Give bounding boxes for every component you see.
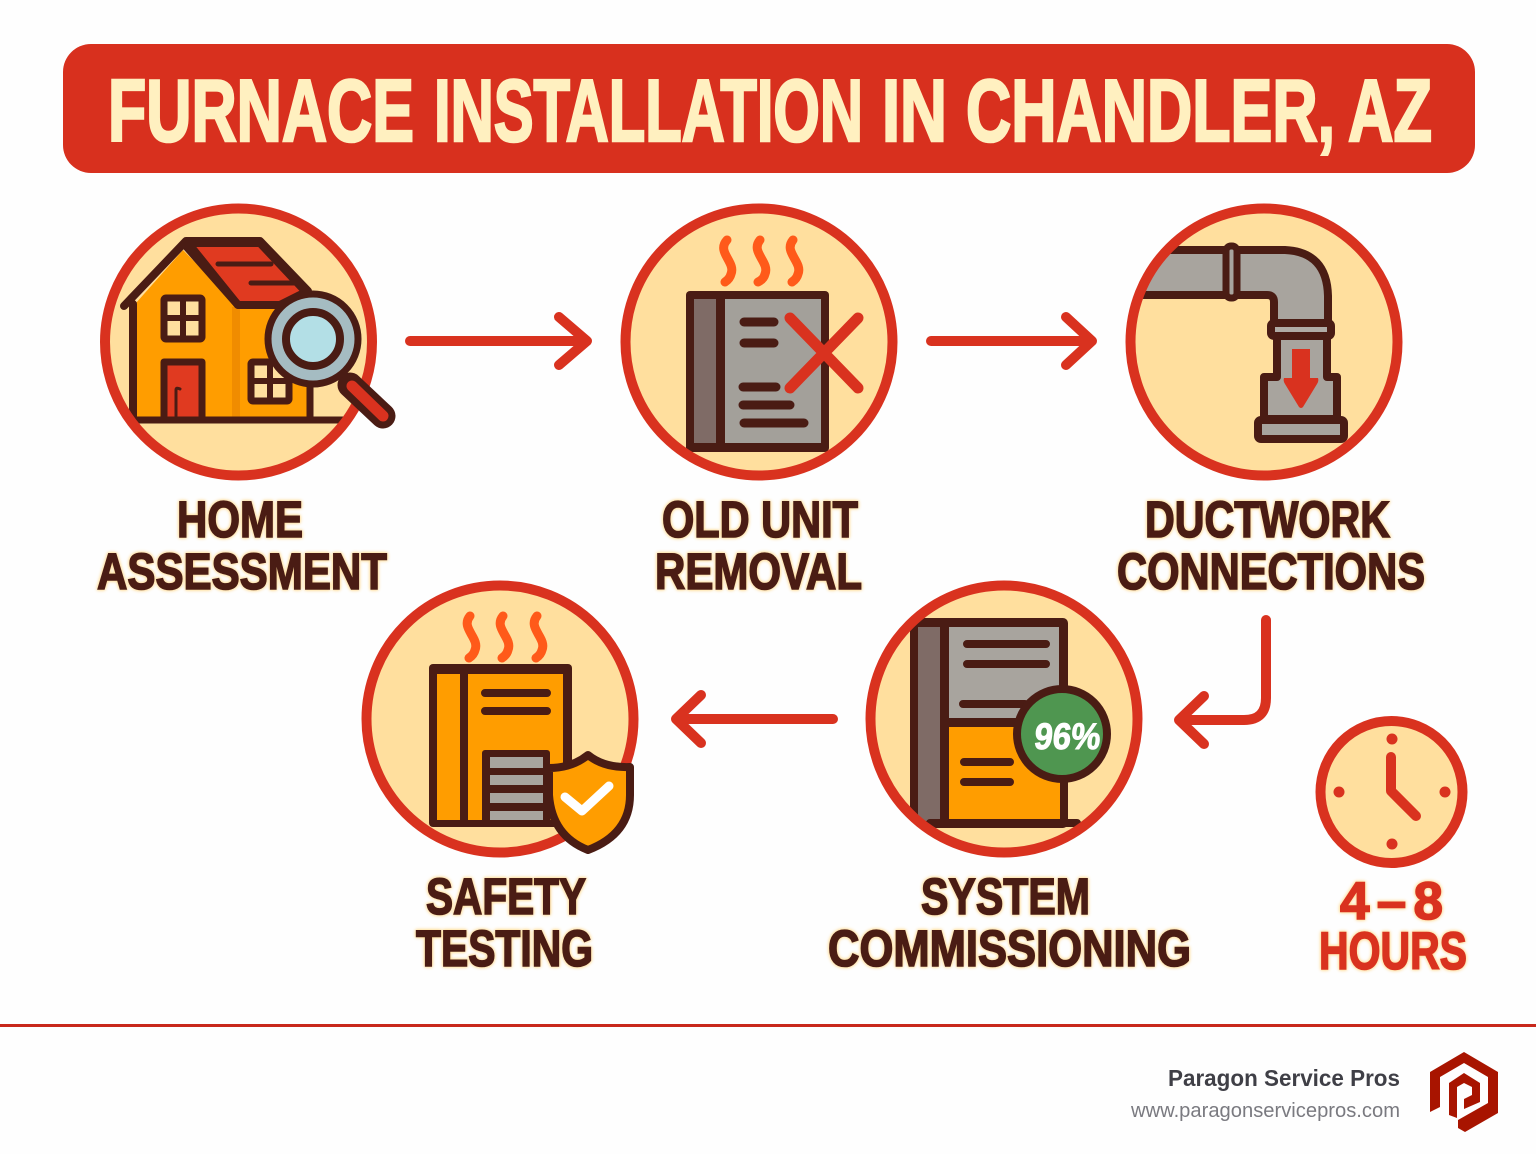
title: CHANDLER,: [966, 61, 1335, 160]
label: safety testing: TESTING: [416, 920, 593, 977]
footer brand text: [1130, 1065, 1400, 1122]
icon: old unit removal: [626, 208, 892, 476]
label: home assessment: ASSESSMENT: [97, 543, 387, 600]
label: ductwork connections: DUCTWORK: [1145, 491, 1390, 548]
icon: clock: [1320, 721, 1462, 863]
logo: [1430, 1052, 1498, 1132]
icon: home assessment: [105, 208, 383, 476]
arrow: step 2 to 3: [931, 317, 1092, 365]
label: home assessment: HOME: [177, 491, 303, 548]
label: system commissioning: [828, 868, 1191, 977]
label: system commissioning: COMMISSIONING: [828, 920, 1191, 977]
label: ductwork connections: CONNECTIONS: [1117, 543, 1425, 600]
label: ductwork connections: [1117, 491, 1425, 600]
title: INSTALLATION: [434, 61, 863, 160]
label: system commissioning: SYSTEM: [921, 868, 1090, 925]
icon: system commissioning: [870, 586, 1138, 852]
duration label: [1319, 872, 1467, 981]
title: FURNACE: [108, 61, 414, 160]
title: [108, 61, 1432, 160]
title: IN: [882, 61, 947, 160]
arrow: step 4 to 5: [676, 695, 833, 743]
footer brand text: Paragon Service Pros: [1168, 1065, 1400, 1091]
icon: safety testing: [366, 586, 634, 852]
label: old unit removal: [655, 491, 862, 600]
duration label: 4 – 8: [1340, 872, 1443, 931]
label: home assessment: [97, 491, 387, 600]
title banner: [63, 44, 1475, 173]
duration label: HOURS: [1319, 922, 1467, 981]
label: safety testing: SAFETY: [426, 868, 586, 925]
icon: system commissioning: 96%: [1032, 715, 1103, 757]
footer brand text: www.paragonservicepros.com: [1130, 1100, 1400, 1122]
label: safety testing: [416, 868, 593, 977]
label: old unit removal: OLD UNIT: [662, 491, 858, 548]
label: old unit removal: REMOVAL: [655, 543, 862, 600]
arrow: step 1 to 2: [410, 317, 587, 365]
arrow: step 3 to 4: [1179, 620, 1266, 744]
icon: ductwork connections: [1120, 208, 1398, 476]
title: AZ: [1348, 61, 1432, 160]
